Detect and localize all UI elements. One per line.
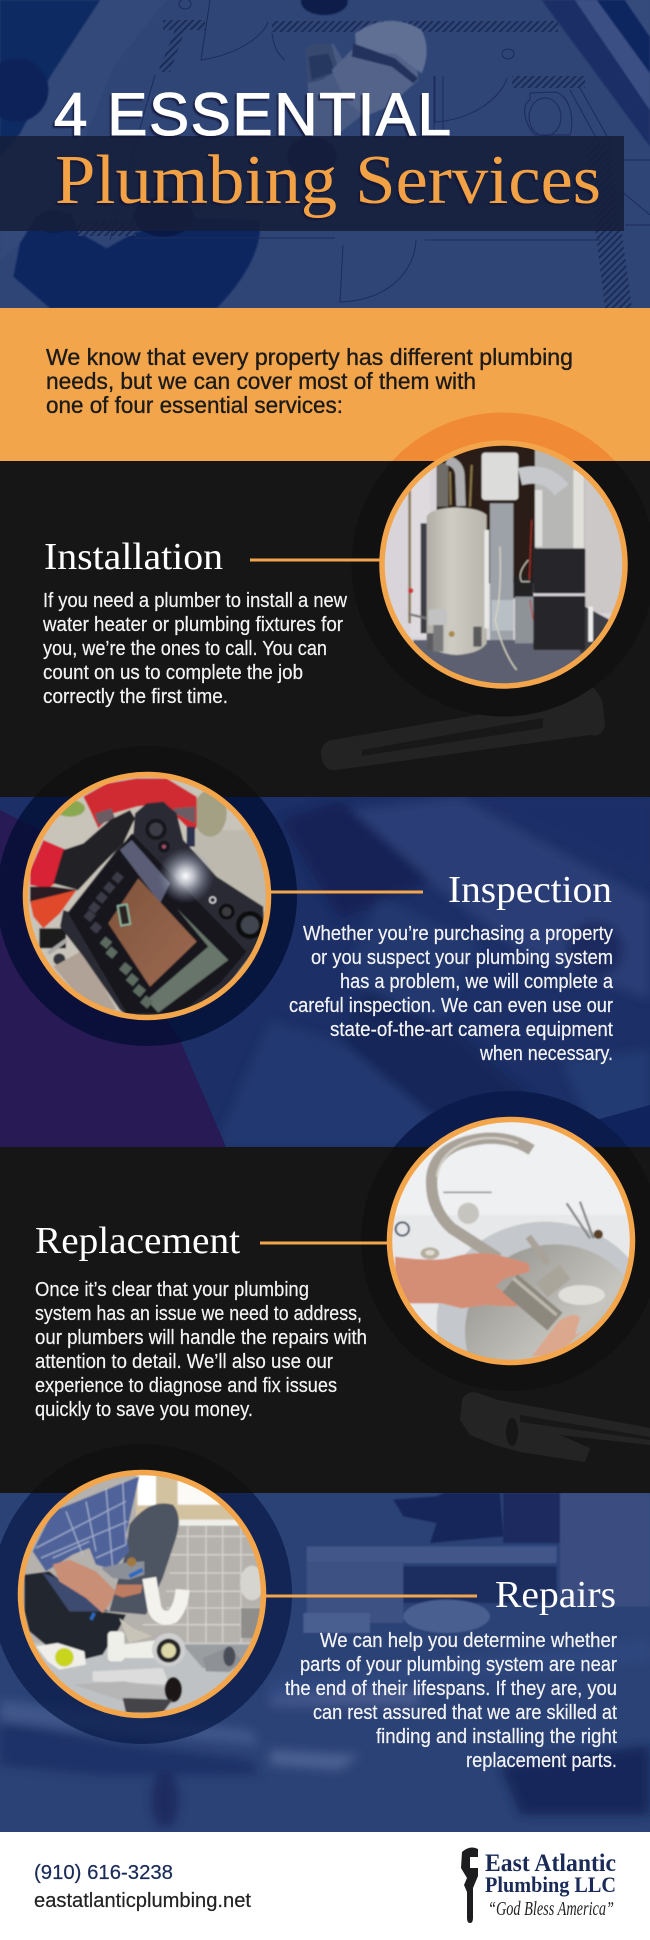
panel: Repairs <box>0 1444 650 1832</box>
intro text: one of four essential services: <box>46 392 343 418</box>
photo ring: Inspection <box>26 774 268 1018</box>
halo: Installation <box>392 412 614 716</box>
title band <box>0 136 624 231</box>
photo ring: Installation <box>382 443 625 686</box>
logo wordmark: East Atlantic <box>485 1850 616 1877</box>
body: Replacement: experience to diagnose and fix issues <box>35 1375 337 1397</box>
panel: footer <box>0 1832 650 1940</box>
title: 4 ESSENTIAL <box>54 81 451 148</box>
icon: faint wrench <box>321 676 605 770</box>
body: Inspection: state-of-the-art camera equipment <box>330 1019 613 1041</box>
connector line: Repairs <box>265 1594 477 1598</box>
heading: Repairs: Repairs <box>495 1574 616 1616</box>
body: Repairs: replacement parts. <box>466 1750 617 1772</box>
body: Replacement: our plumbers will handle the repairs with <box>35 1327 367 1349</box>
title <box>54 81 601 219</box>
photo ring: Replacement <box>390 1120 632 1362</box>
photo ring: Repairs <box>20 1472 264 1716</box>
halo: Replacement <box>394 1091 628 1147</box>
panel: Inspection <box>0 746 650 1147</box>
icon: faint wrench <box>460 1392 650 1462</box>
body: Installation: you, we’re the ones to call. You can <box>43 638 327 660</box>
body: Replacement: Once it’s clear that your plumbing <box>35 1279 309 1301</box>
panel: Installation <box>0 412 650 797</box>
heading: Installation: Installation <box>44 536 223 578</box>
body: Replacement: attention to detail. We’ll also use our <box>35 1351 333 1373</box>
intro text <box>46 344 573 418</box>
body: Repairs: can rest assured that we are skilled at <box>313 1702 617 1724</box>
halo: Inspection <box>0 797 297 1046</box>
body: Inspection: careful inspection. We can even use our <box>289 995 613 1017</box>
intro text: needs, but we can cover most of them with <box>46 368 476 394</box>
body: Installation: water heater or plumbing fixtures for <box>42 614 343 636</box>
photo: water heater and furnace <box>384 446 622 684</box>
body: Repairs: finding and installing the right <box>376 1726 617 1748</box>
body: Repairs: We can help you determine whether <box>320 1630 617 1652</box>
title: Plumbing Services <box>55 142 601 219</box>
connector line: Replacement <box>260 1242 388 1244</box>
body: Inspection <box>289 923 614 1065</box>
panel: Replacement <box>0 1091 650 1493</box>
body: Repairs <box>285 1630 617 1772</box>
body: Inspection: when necessary. <box>479 1043 613 1065</box>
body: Installation: count on us to complete the job <box>43 662 303 684</box>
body: Installation: If you need a plumber to install a new <box>43 590 348 612</box>
connector line: Inspection <box>270 890 423 894</box>
phone number: (910) 616-3238 <box>34 1862 173 1884</box>
logo wordmark: Plumbing LLC <box>485 1872 616 1897</box>
body: Installation <box>42 590 348 708</box>
panel: header background with blueprint and pipe fitting <box>0 0 650 308</box>
body: Inspection: Whether you’re purchasing a property <box>303 923 613 945</box>
body: Repairs: parts of your plumbing system are near <box>300 1654 617 1676</box>
intro text: We know that every property has different plumbing <box>46 344 573 370</box>
website: eastatlanticplumbing.net <box>34 1890 251 1912</box>
body: Inspection: has a problem, we will complete a <box>340 971 614 993</box>
body: Repairs: the end of their lifespans. If they are, you <box>285 1678 617 1700</box>
icon: pipe wrench logo <box>461 1848 478 1923</box>
body: Replacement: quickly to save you money. <box>35 1399 253 1421</box>
heading: Replacement: Replacement <box>35 1220 240 1262</box>
photo: hands fitting a faucet over a sink <box>392 1122 630 1360</box>
panel: intro band <box>0 308 650 461</box>
body: Installation: correctly the first time. <box>43 686 228 708</box>
photo: plumber assembling white pipes <box>23 1475 261 1713</box>
blueprint wall hatching <box>78 0 650 308</box>
body: Inspection: or you suspect your plumbing system <box>311 947 613 969</box>
body: Replacement <box>35 1279 367 1421</box>
header corner bands <box>542 0 650 147</box>
heading: Inspection: Inspection <box>448 869 612 911</box>
connector line: Installation <box>250 558 380 562</box>
logo: East Atlantic Plumbing <box>461 1848 616 1923</box>
body: Replacement: system has an issue we need to address, <box>35 1303 362 1325</box>
icon: pipe elbow fitting <box>300 0 428 136</box>
logo wordmark <box>485 1850 616 1897</box>
photo: pipe inspection camera monitor <box>28 777 266 1015</box>
halo: Repairs <box>0 1493 292 1744</box>
